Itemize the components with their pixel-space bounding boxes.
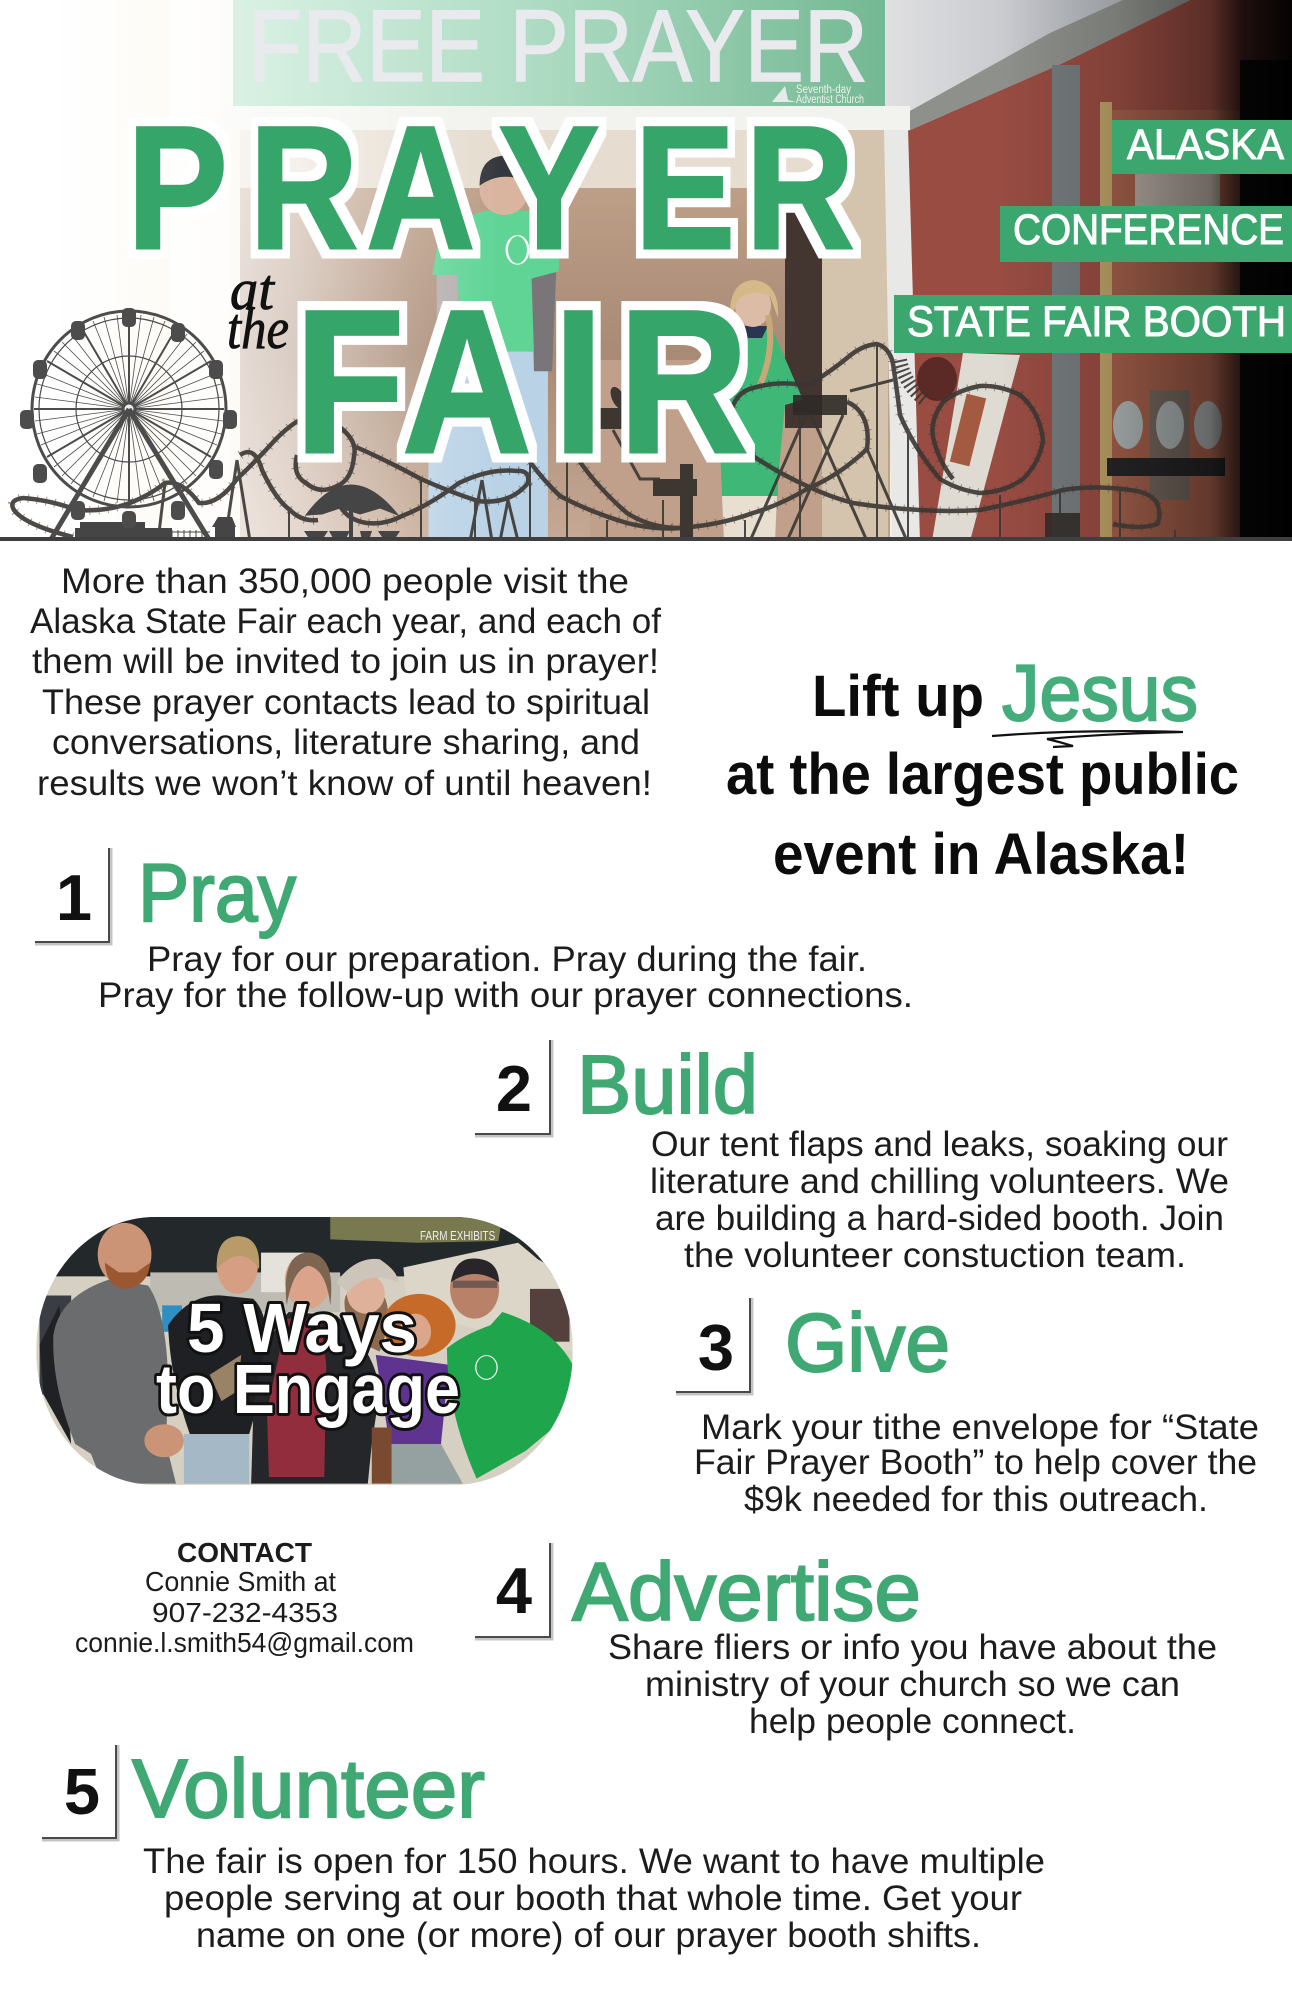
body: Build: literature and chilling volunteers. We [650, 1162, 1229, 1201]
callout: Lift up Jesus: event in Alaska! [773, 822, 1189, 887]
header photo banner [0, 0, 1292, 541]
woman in black jacket [168, 1236, 269, 1484]
ground line [0, 537, 1292, 541]
body: Give [694, 1408, 1259, 1519]
contact block: Connie Smith at [145, 1566, 336, 1597]
intro paragraph: Alaska State Fair each year, and each of [30, 602, 661, 641]
roller coaster silhouette [12, 344, 1175, 541]
title: PRAYER: PRAYER [127, 89, 854, 286]
tag: ALASKA: ALASKA [1127, 121, 1284, 169]
number box 4: 4 [496, 1554, 532, 1627]
roof band [908, 0, 1190, 131]
man in gray jacket [40, 1223, 184, 1484]
body: Volunteer: name on one (or more) of our prayer booth shifts. [196, 1916, 981, 1955]
person in green shirt [428, 156, 560, 541]
body: Pray: Pray for our preparation. Pray during the fair. [147, 940, 867, 979]
step 3: Give [676, 1296, 1259, 1519]
intro paragraph: them will be invited to join us in prayer! [32, 642, 659, 681]
man in green shirt [447, 1259, 573, 1479]
number box 3: 3 [698, 1311, 734, 1384]
dark wheel [917, 357, 957, 401]
right dark fade [1032, 0, 1292, 537]
left white fade [60, 0, 481, 537]
heading: Give: Give [785, 1296, 950, 1389]
group photo: volunteers at the fair: FARM EXHIBITS [420, 1229, 495, 1244]
number box 5 [42, 1745, 118, 1840]
woman in hat [336, 1259, 398, 1352]
step 2: Build [475, 1038, 1229, 1275]
body: Advertise: help people connect. [749, 1702, 1076, 1741]
body: Build [650, 1125, 1229, 1275]
intro paragraph: results we won’t know of until heaven! [37, 764, 652, 803]
callout: Lift up Jesus [726, 648, 1239, 887]
contact block: CONTACT [177, 1537, 312, 1568]
photo title: 5 Ways to Engage [156, 1289, 460, 1428]
heading: Advertise: Advertise [572, 1545, 921, 1638]
roll-up sign [932, 353, 1020, 541]
body: Advertise: ministry of your church so we can [645, 1665, 1180, 1704]
body: Volunteer: people serving at our booth that whole time. Get your [164, 1879, 1022, 1918]
photo title: 5 Ways to Engage: 5 Ways [187, 1289, 417, 1367]
girl in green shirt [718, 280, 803, 541]
tent interior [240, 188, 888, 537]
booth photo background [156, 0, 1290, 537]
step 5: Volunteer [42, 1742, 1045, 1955]
number box 2: 2 [496, 1052, 532, 1125]
callout: Lift up Jesus: Jesus [1002, 648, 1198, 737]
gray post [1052, 65, 1080, 541]
intro paragraph [30, 562, 661, 803]
photo title: 5 Ways to Engage: to Engage [156, 1350, 460, 1428]
body: Volunteer [143, 1842, 1045, 1955]
girl with red hair [372, 1294, 463, 1484]
contact block: 907-232-4353 [152, 1597, 338, 1628]
body: Volunteer: The fair is open for 150 hours. We want to have multiple [143, 1842, 1045, 1881]
sign banner [233, 0, 885, 106]
body: Build: are building a hard-sided booth. Join [655, 1199, 1224, 1238]
contact block [75, 1537, 414, 1658]
number box 1 [35, 848, 111, 944]
church logo: Adventist Church [796, 94, 864, 106]
step 4: Advertise [475, 1543, 1217, 1741]
body: Give: Fair Prayer Booth” to help cover the [694, 1443, 1257, 1482]
title: FAIR: FAIR [295, 267, 748, 496]
callout: Lift up Jesus: at the largest public [726, 742, 1239, 807]
body: Build: Our tent flaps and leaks, soaking our [651, 1125, 1228, 1164]
body: Advertise: Share fliers or info you have about the [608, 1628, 1217, 1667]
ferris wheel [20, 308, 237, 541]
body: Give: $9k needed for this outreach. [744, 1480, 1208, 1519]
number box 2 [475, 1040, 552, 1136]
red barn wall [908, 0, 1292, 541]
body: Build: the volunteer constuction team. [684, 1236, 1186, 1275]
title: the: the [227, 296, 289, 361]
woman in red shirt [251, 1253, 380, 1484]
body: Pray [98, 940, 913, 1015]
intro paragraph: More than 350,000 people visit the [61, 562, 629, 601]
group photo: volunteers at the fair [36, 1217, 573, 1485]
number box 5: 5 [64, 1755, 100, 1828]
body: Give: Mark your tithe envelope for “State [701, 1408, 1259, 1447]
church logo [772, 84, 864, 103]
callout: Lift up Jesus: Lift up [812, 664, 984, 729]
church logo: Seventh-day [796, 84, 851, 96]
white tent post [884, 128, 920, 541]
body: Pray: Pray for the follow-up with our prayer connections. [98, 976, 913, 1015]
intro paragraph: These prayer contacts lead to spiritual [42, 683, 650, 722]
carousel and fair stalls [75, 485, 400, 541]
heading: Pray: Pray [138, 846, 296, 939]
title: at: at [230, 257, 276, 322]
contact block: connie.l.smith54@gmail.com [75, 1627, 414, 1658]
sky behind roof [885, 0, 1185, 125]
number box 3 [676, 1298, 752, 1394]
number box 1: 1 [56, 861, 92, 934]
step 1: Pray [35, 846, 913, 1015]
intro paragraph: conversations, literature sharing, and [52, 723, 640, 762]
dark doorway [1240, 60, 1282, 537]
heading: Volunteer: Volunteer [132, 1742, 485, 1835]
heading: Build: Build [577, 1038, 758, 1131]
number box 4 [475, 1543, 552, 1639]
body: Advertise [608, 1628, 1217, 1741]
poster [1100, 102, 1225, 537]
